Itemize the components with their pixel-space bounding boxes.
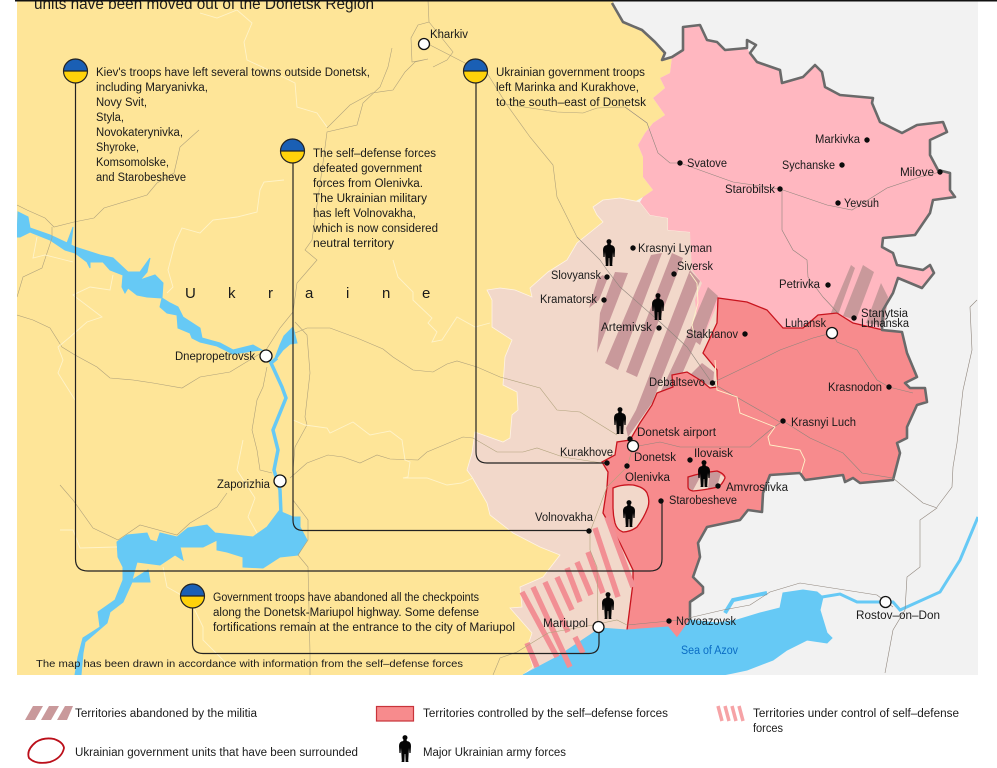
- legend item: territories controlled by the self-defense forces: [376, 706, 668, 721]
- label: Ukraine: r: [268, 285, 273, 302]
- city: Kurakhove: Kurakhove: [560, 447, 613, 459]
- city: Zaporizhia: Zaporizhia: [217, 479, 271, 491]
- city: Kurakhove: [560, 447, 613, 466]
- icon: Ukrainian army forces near Artemivsk: [652, 293, 664, 320]
- city: Yevsuh: Yevsuh: [844, 198, 879, 210]
- city: Volnovakha: [535, 512, 594, 534]
- callout: Marinka and Kurakhove: [464, 59, 646, 109]
- territory: Luhansk region: [638, 25, 955, 345]
- city: Kramatorsk: Kramatorsk: [540, 294, 597, 306]
- city: Krasnyi Lyman: Krasnyi Lyman: [638, 243, 712, 255]
- territory: Donetsk region outside militia control: [467, 198, 720, 675]
- city: Petrivka: [780, 279, 831, 288]
- city: Olenivka: Olenivka: [625, 472, 671, 484]
- legend item: surrounded units: Ukrainian government units that have been surrounded: [75, 747, 358, 759]
- place: Donetsk airport: Donetsk airport: [637, 427, 717, 439]
- callout text: Komsomolske,: [96, 157, 169, 169]
- legend item: territories abandoned by the militia: Territories abandoned by the militia: [75, 708, 258, 720]
- label: Sea of Azov: Sea of Azov: [681, 645, 738, 657]
- callout text: [496, 67, 646, 109]
- outline: self-defense forces frontline: [602, 298, 883, 630]
- city: Kharkiv: [418, 29, 468, 50]
- callout text: [213, 592, 515, 634]
- icon: Ukrainian army forces near Slovyansk: [603, 239, 615, 266]
- city: Volnovakha: Volnovakha: [535, 512, 594, 524]
- label: Ukraine: U: [185, 285, 196, 302]
- callout text: Kiev's troops have left several towns outside Donetsk,: [96, 67, 370, 79]
- city: Milove: [900, 167, 943, 176]
- top rule: [15, 0, 997, 2]
- callout text: along the Donetsk-Mariupol highway. Some defense: [213, 607, 479, 619]
- callout text: defeated government: [313, 163, 423, 175]
- callout text: neutral territory: [313, 238, 394, 250]
- city: Starobesheve: Starobesheve: [669, 495, 737, 507]
- city: Donetsk: [628, 440, 676, 464]
- icon: Ukrainian army forces at Ilovaisk pocket: [698, 460, 710, 487]
- city: Kharkiv: Kharkiv: [430, 29, 468, 41]
- city: Donetsk: Donetsk: [634, 452, 676, 464]
- city: Krasnyi Luch: Krasnyi Luch: [791, 417, 856, 429]
- callout text: left Marinka and Kurakhove,: [496, 82, 639, 94]
- legend item: territories under control of self-defense forces: Territories under control of self–defense: [753, 708, 959, 720]
- legend item: territories controlled by the self-defense forces: Territories controlled by the self–defense forces: [423, 708, 668, 720]
- callout text: fortifications remain at the entrance to the city of Mariupol: [213, 622, 515, 634]
- city: Mariupol: [543, 618, 604, 632]
- city: Svatove: Svatove: [687, 158, 727, 170]
- flag icon: [180, 584, 204, 608]
- city: Stanytsia Luhanska: Stanytsia: [861, 308, 909, 320]
- Sea of Azov: [523, 590, 832, 675]
- callout text: The self–defense forces: [313, 148, 436, 160]
- city: Luhansk: [785, 318, 838, 338]
- icon: Ukrainian army forces near Donetsk: [614, 407, 626, 434]
- callout text: forces from Olenivka.: [313, 178, 423, 190]
- city: Ilovaisk: Ilovaisk: [694, 448, 733, 460]
- city: Olenivka: [624, 463, 671, 484]
- legend item: territories under control of self-defense forces: forces: [753, 723, 783, 735]
- city: Petrivka: Petrivka: [779, 279, 821, 291]
- callout text: including Maryanivka,: [96, 82, 208, 94]
- city: Zaporizhia: [217, 475, 286, 491]
- city: Markivka: Markivka: [815, 134, 861, 146]
- city: Stanytsia Luhanska: [851, 308, 910, 330]
- city: Siversk: [671, 261, 713, 277]
- callout text: [312, 148, 438, 250]
- pocket: surrounded units near Amvrosiivka: [687, 470, 726, 492]
- border lines: [612, 3, 955, 620]
- callout text: to the south–east of Donetsk: [496, 97, 646, 109]
- city: Sychanske: Sychanske: [782, 160, 835, 172]
- callout text: [96, 67, 370, 184]
- callout: Donetsk-Mariupol highway: [180, 584, 515, 634]
- label: Ukraine: k: [228, 285, 236, 302]
- callout text: Styla,: [96, 112, 124, 124]
- city: Starobilsk: [726, 184, 783, 193]
- river: Don: [822, 517, 978, 610]
- background: Russia: [613, 2, 978, 675]
- callout text: Novy Svit,: [96, 97, 147, 109]
- city: Stanytsia Luhanska: Luhanska: [861, 318, 910, 330]
- callout text: Shyroke,: [96, 142, 139, 154]
- city: Svatove: [677, 158, 726, 167]
- river: Dnieper middle reach: [275, 327, 297, 358]
- internal boundaries: [33, 10, 805, 667]
- callout text: The Ukrainian military: [313, 193, 427, 205]
- city: Stakhanov: Stakhanov: [686, 329, 738, 341]
- callout: Olenivka and Volnovakha: [280, 139, 438, 250]
- callout text: has left Volnovakha,: [313, 208, 416, 220]
- city: Rostov-on-Don: Rostov–on–Don: [856, 610, 940, 622]
- label: Ukraine: i: [346, 285, 349, 302]
- city: Siversk: Siversk: [677, 261, 713, 273]
- callout text: Ukrainian government troops: [496, 67, 645, 79]
- rivers and lakes: [17, 212, 978, 675]
- label: Ukraine: e: [422, 285, 430, 302]
- city: Dnepropetrovsk: Dnepropetrovsk: [175, 351, 255, 363]
- callout text: and Starobesheve: [96, 172, 186, 184]
- reservoir: Kakhovka: [75, 511, 307, 675]
- legend item: major Ukrainian army forces: [399, 735, 566, 762]
- city: Novoazovsk: Novoazovsk: [676, 616, 736, 628]
- city: Amvrosiivka: Amvrosiivka: [726, 482, 789, 494]
- city: Ilovaisk: [687, 448, 733, 463]
- city: Artemivsk: Artemivsk: [601, 322, 652, 334]
- legend: [25, 706, 959, 763]
- city: Debaltsevo: Debaltsevo: [649, 377, 705, 389]
- flag icon: [280, 139, 304, 163]
- legend item: territories abandoned by the militia: [25, 706, 258, 720]
- city: Mariupol: Mariupol: [543, 618, 588, 630]
- label: Ukraine: a: [305, 285, 314, 302]
- pocket: surrounded units near Olenivka: [613, 485, 649, 532]
- territory: controlled by the self-defense forces: [602, 298, 927, 638]
- city: Yevsuh: [835, 198, 878, 207]
- city: Krasnodon: Krasnodon: [828, 382, 882, 394]
- legend item: territories under control of self-defense forces: [718, 706, 959, 735]
- flag icon: [464, 59, 488, 83]
- city: Luhansk: Luhansk: [785, 318, 826, 330]
- callout text: which is now considered: [312, 223, 438, 235]
- callout: towns outside Donetsk: [64, 59, 370, 184]
- leader lines: [76, 83, 662, 654]
- city: Milove: Milove: [900, 167, 934, 179]
- city: Markivka: [816, 134, 870, 143]
- label: Ukraine: [185, 285, 430, 302]
- icon: Ukrainian army forces near Mariupol: [602, 592, 614, 619]
- city: Slovyansk: Slovyansk: [551, 270, 601, 282]
- callout text: Novokaterynivka,: [96, 127, 183, 139]
- callout text: Government troops have abandoned all the checkpoints: [213, 592, 479, 604]
- legend item: surrounded units: [28, 738, 358, 763]
- hatching: territories abandoned by the militia: [589, 253, 888, 437]
- legend item: major Ukrainian army forces: Major Ukrainian army forces: [423, 747, 566, 759]
- hatching: territories under control of self-defense forces: [522, 517, 633, 667]
- river: Dnieper upper reach: [17, 212, 262, 354]
- territory: Ukraine: [17, 0, 672, 675]
- city: Starobilsk: Starobilsk: [725, 184, 775, 196]
- city: Rostov-on-Don: [856, 596, 940, 622]
- flag icon: [64, 59, 88, 83]
- icon: Ukrainian army forces at Olenivka pocket: [623, 500, 635, 527]
- source note: The map has been drawn in accordance with information from the self–defense forces: [36, 658, 463, 670]
- label: Ukraine: n: [382, 285, 390, 302]
